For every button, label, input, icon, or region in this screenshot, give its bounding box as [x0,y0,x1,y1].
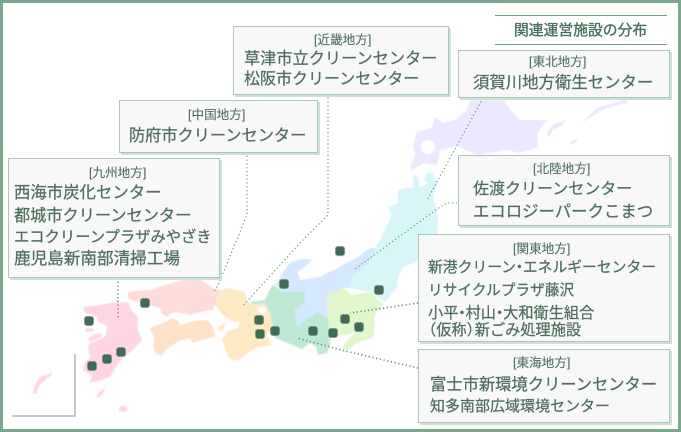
panel: Tokai: [東海地方] [513,356,570,370]
leader lines [118,94,483,368]
panel: Chugoku [119,100,318,153]
panel: Tokai [418,349,670,423]
panel: Tokai: 知多南部広域環境センター [430,398,610,415]
panel: Kyushu [8,158,220,278]
Osaka bay [257,307,267,313]
panel: Kyushu: エコクリーンプラザみやざき [14,229,212,246]
panel: Kanto: [関東地方] [513,242,570,256]
panel: Kanto: 小平・村山・大和衛生組合 [428,305,594,322]
region: Kyushu [33,302,142,412]
region: Kinki [215,288,273,361]
panel: Tohoku: 須賀川地方衛生センター [473,74,653,92]
panel: Kanto: 新港クリーン・エネルギーセンター [428,260,656,276]
region: Hokuriku and Koshin [275,247,375,327]
panel: Tohoku [458,50,670,98]
panel: Hokuriku: [北陸地方] [533,162,590,176]
title: 関連運営施設の分布 [514,23,647,39]
panel: Chugoku: 防府市クリーンセンター [129,127,306,145]
inset divider for Okinawa [12,354,75,416]
panel: Kanto: （仮称）新ごみ処理施設 [421,322,581,339]
panel: Kyushu: 鹿児島新南部清掃工場 [14,249,180,268]
panel: Kyushu: 都城市クリーンセンター [14,207,191,225]
panel: Kanto [418,234,670,342]
panel: Kinki: 草津市立クリーンセンター [244,50,437,68]
Hokkaido bay [421,140,435,154]
panel: Kinki: [近畿地方] [314,33,371,47]
region: Shikoku [150,318,215,356]
panel: Tohoku: [東北地方] [529,55,586,69]
panel: Kanto: リサイクルプラザ藤沢 [428,283,574,299]
region: Hokkaido [410,98,628,170]
region: Tohoku [350,172,438,302]
panel: Kyushu: 西海市炭化センター [14,184,162,202]
facility markers [84,246,384,370]
panel: Chugoku: [中国地方] [188,108,245,122]
region: Tokai [250,285,330,355]
panel: Kyushu: [九州地方] [89,166,146,180]
land regions [33,98,628,412]
panel: Hokuriku [458,155,670,226]
title [495,15,667,45]
panel: Kinki: 松阪市クリーンセンター [244,71,419,88]
region: Kanto [325,288,383,353]
panel: Kinki [233,26,449,95]
panel: Tokai: 富士市新環境クリーンセンター [430,376,657,394]
region: Chugoku [128,279,226,317]
panel: Hokuriku: 佐渡クリーンセンター [473,181,632,198]
panel: Hokuriku: エコロジーパークこまつ [473,203,653,221]
